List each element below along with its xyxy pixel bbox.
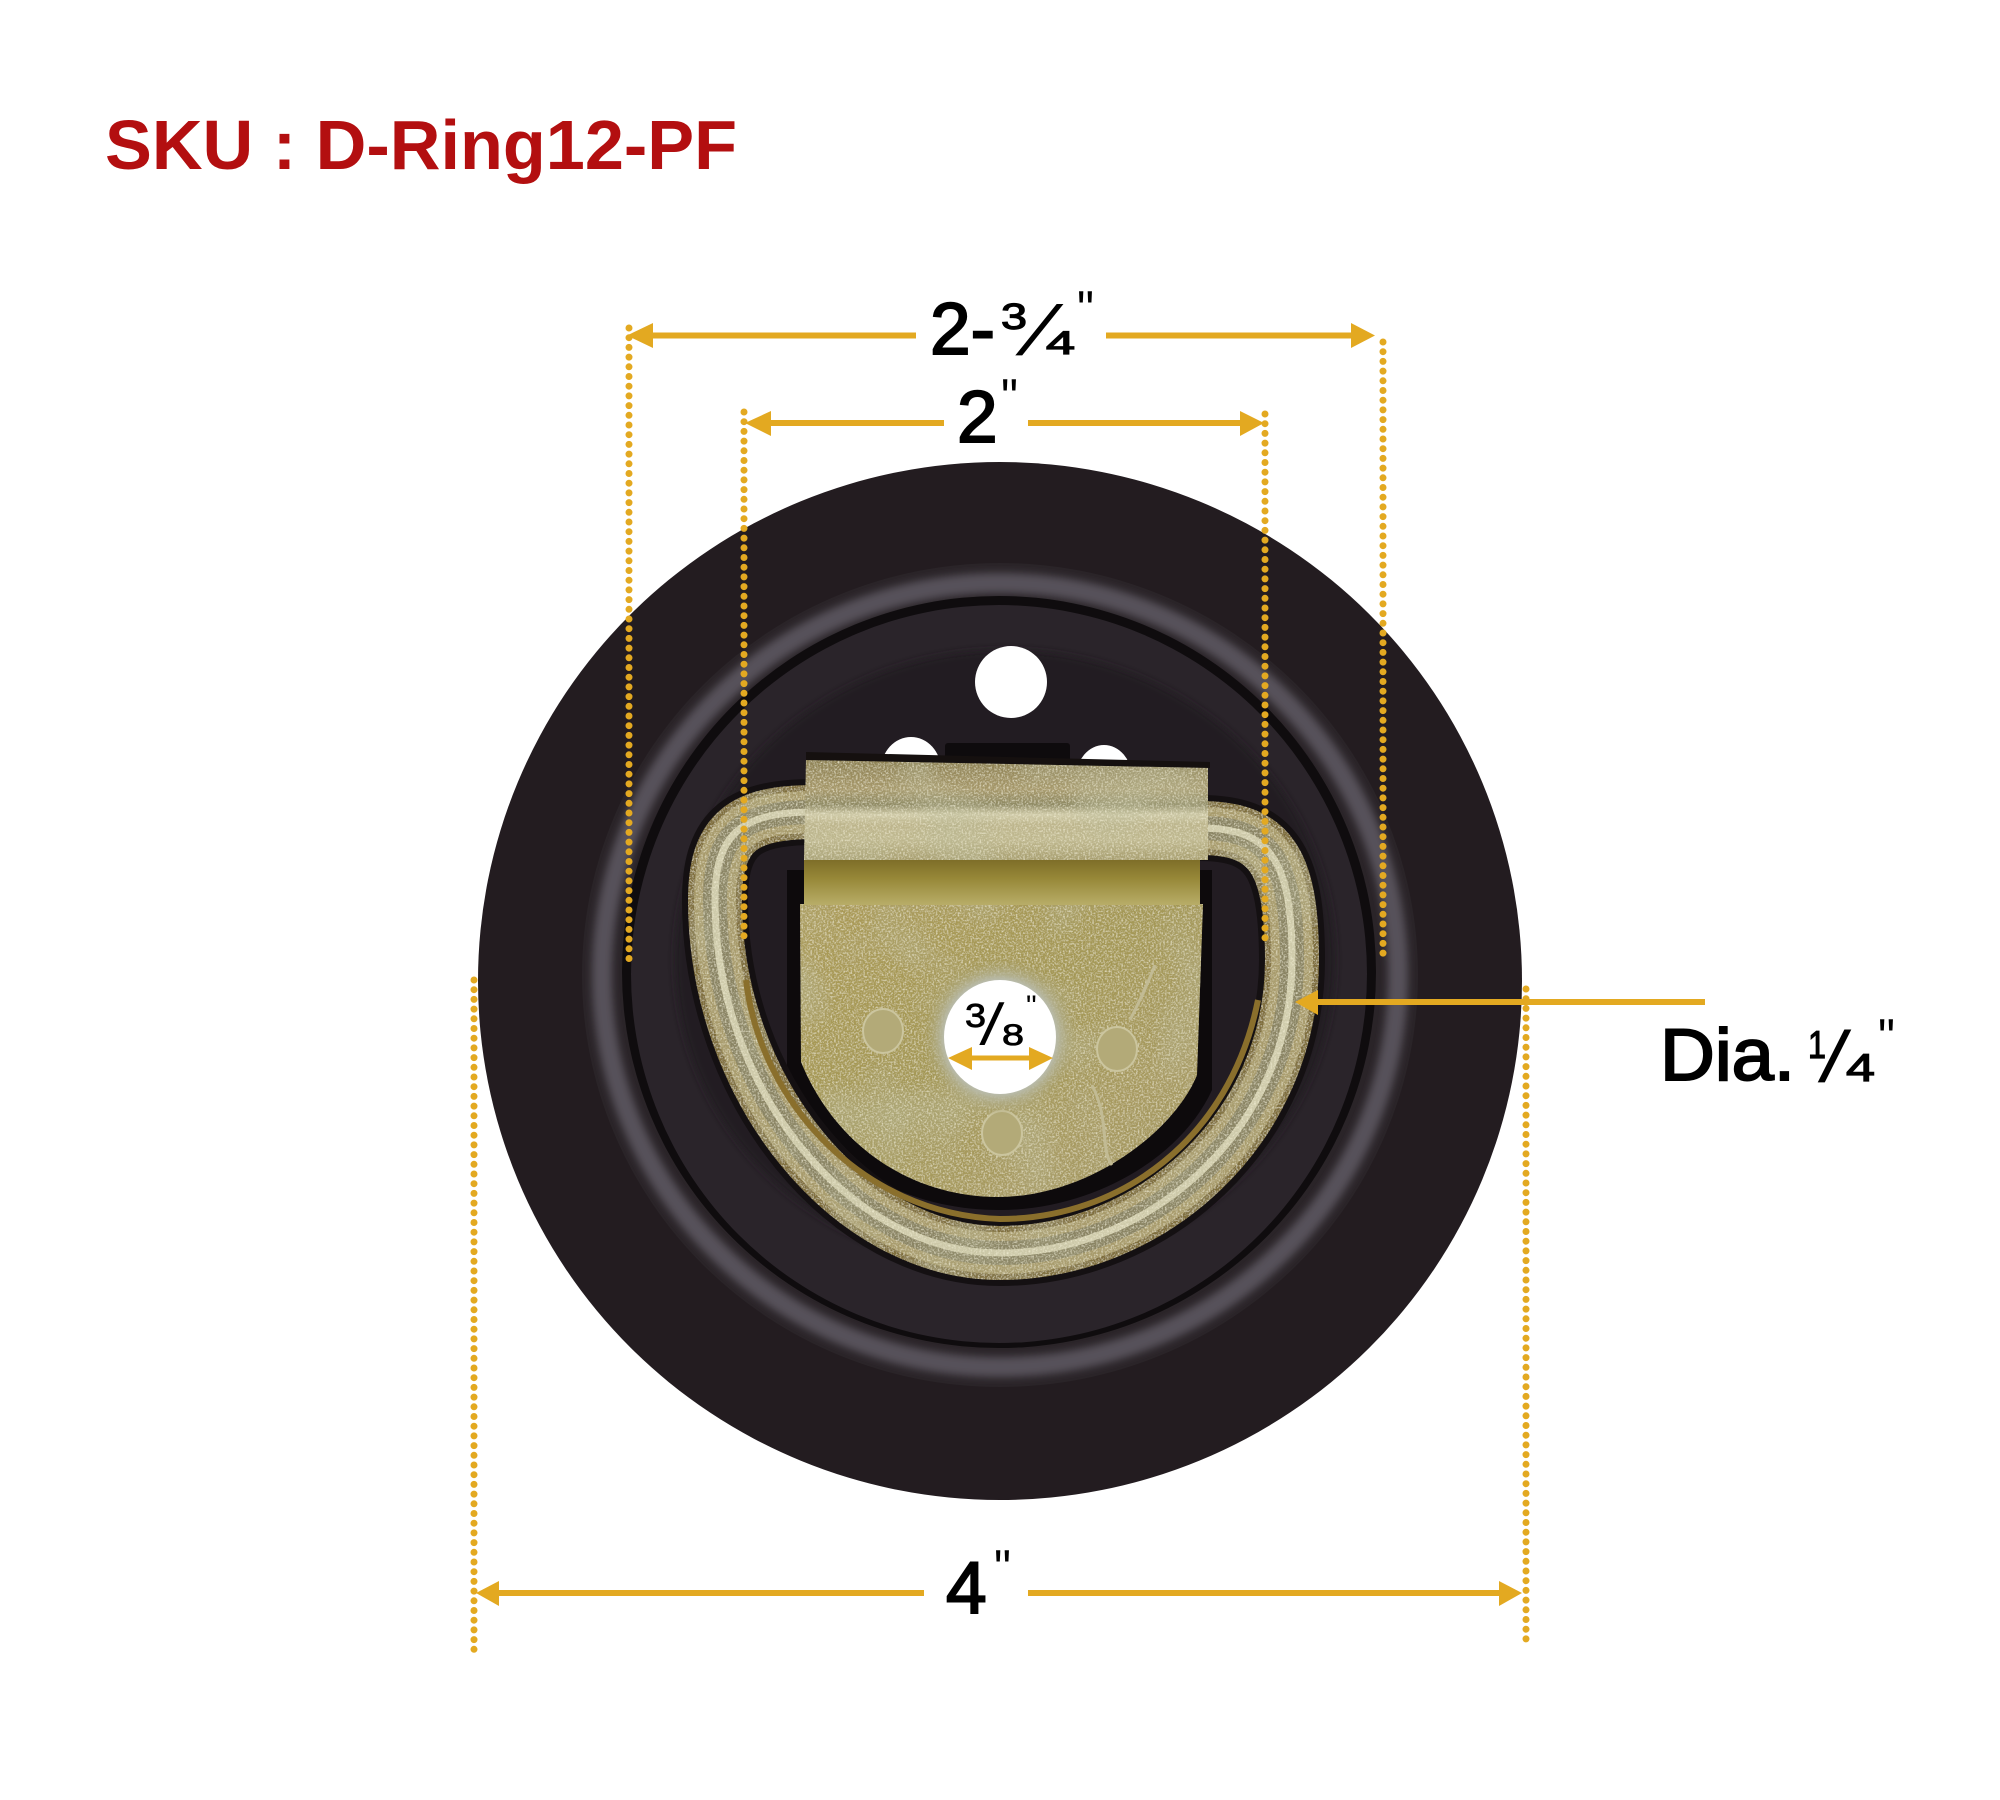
leader arrow: ring diameter [1295,990,1705,1015]
dotted guide: 2-3/4 right [1380,342,1386,959]
plate flat [800,904,1203,1197]
raised ring of pan [582,563,1418,1387]
label: 4 inches: " [994,1540,1011,1598]
label: Dia. 1/4 inch: Dia. [1660,1015,1795,1096]
label: Dia. 1/4 inch: 4 [1846,1047,1875,1090]
label: Dia. 1/4 inch: / [1815,1019,1853,1097]
label: Dia. 1/4 inch [1660,1009,1895,1097]
dotted guide: 2 right [1262,414,1268,945]
product photo: D-ring on round pan [478,462,1522,1500]
label: 3/8 inch: 3 [965,997,986,1034]
groove and inner dish [622,596,1376,1348]
plate hole rim [922,957,1078,1117]
dimension arrow: hole 3/8 [948,1047,1053,1070]
label: Dia. 1/4 inch: " [1878,1009,1895,1067]
rivet dimples [863,1009,1137,1155]
label: 4 inches [946,1540,1011,1629]
dotted guide: 4 right [1522,989,1530,1645]
hinge top shadow [806,752,1210,768]
dotted guide: 2 left [740,412,748,941]
label: 3/8 inch: " [1026,990,1037,1023]
dimension arrow: 2-3/4 [627,323,1375,348]
plate hinge tube [804,759,1208,860]
dish centre recess [675,650,1335,1270]
plate crack marks [1092,965,1155,1165]
label: 3/8 inch [965,990,1037,1057]
label: 4 inches: 4 [946,1548,987,1629]
label: 2-3/4 inches: 2- [930,289,995,370]
label: 3/8 inch: 8 [1002,1019,1024,1052]
dotted guide: 2-3/4 left [626,328,632,963]
dimension arrow: 2 [745,411,1264,436]
label: 2 inches: 2 [957,377,998,458]
dotted guide: 4 left [470,980,478,1655]
title: SKU : D-Ring12-PF [105,106,737,184]
plate fold [804,857,1200,905]
plate hole [944,980,1056,1094]
label: 2-3/4 inches: 4 [1046,325,1075,361]
label: 2-3/4 inches: / [1009,293,1069,369]
clip behind plate [945,743,1070,763]
label: 2 inches [957,369,1018,458]
label: Dia. 1/4 inch: 1 [1808,1024,1826,1067]
mounting hole: top [975,646,1047,718]
mounting hole: right [1076,745,1132,811]
mounting hole: left [881,737,941,803]
label: 3/8 inch: / [977,993,1006,1057]
shadow recess around plate [787,870,1212,1210]
label: 2-3/4 inches: " [1077,281,1094,339]
label: 2-3/4 inches [930,281,1094,370]
inner ring gold reflection [746,980,1258,1219]
D-ring shadow [715,812,1292,1253]
D-ring [715,812,1292,1253]
label: 2-3/4 inches: 3 [1001,296,1027,337]
label: 2 inches: " [1001,369,1018,427]
dimension arrow: 4 [476,1581,1522,1606]
plate with hole [800,752,1210,1197]
outer disc [478,462,1522,1500]
